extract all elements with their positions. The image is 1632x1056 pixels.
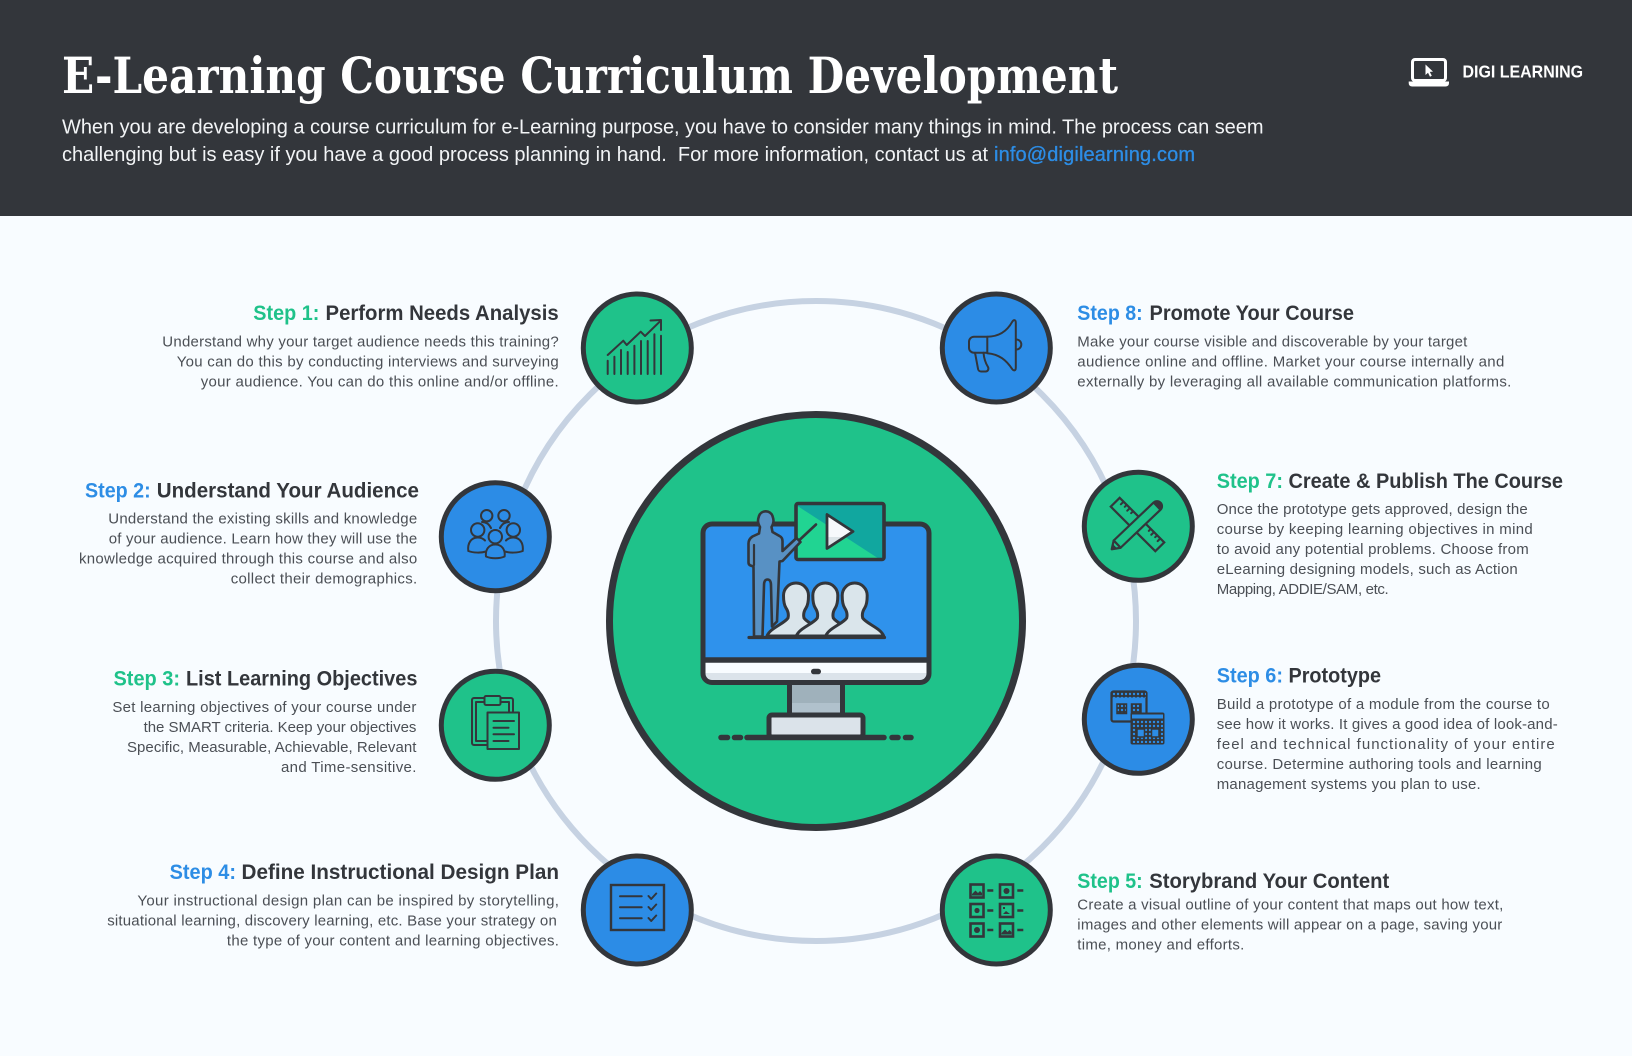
heading: step 5: Storybrand Your Content	[1149, 870, 1389, 893]
text: step 7: course by keeping learning objectives in mind	[1217, 521, 1533, 538]
video panel	[796, 504, 884, 560]
text: step 4: Your instructional design plan can be inspired by storytelling,	[137, 893, 559, 910]
intro text: info@digilearning.com	[994, 144, 1195, 166]
intro text: When you are developing a course curriculum for e-Learning purpose, you have to consider many things in mind. The process can seem	[62, 116, 1264, 138]
text: step 7: Mapping, ADDIE/SAM, etc.	[1217, 581, 1389, 598]
text: step 7: eLearning designing models, such as Action	[1217, 561, 1518, 578]
text: step 2	[79, 511, 417, 588]
text: step 1: Understand why your target audience needs this training?	[162, 334, 559, 351]
text: step 2: knowledge acquired through this course and also	[79, 551, 417, 568]
panel: step 7	[1084, 470, 1563, 598]
text: step 3: and Time-sensitive.	[281, 759, 416, 776]
icon: laptop logo	[1409, 60, 1449, 86]
text: step 5: Create a visual outline of your content that maps out how text,	[1077, 896, 1503, 913]
header banner	[0, 0, 1632, 216]
heading: step 3: List Learning Objectives	[186, 668, 417, 691]
text: step 3: Set learning objectives of your course under	[112, 699, 416, 716]
text: step 6: feel and technical functionality of your entire	[1217, 736, 1555, 753]
panel: step 8	[942, 294, 1511, 402]
title: E-Learning Course Curriculum Development	[62, 47, 1118, 105]
panel: step 1	[162, 294, 691, 402]
icon: checklist	[583, 856, 691, 964]
text: step 8: externally by leveraging all available communication platforms.	[1077, 374, 1511, 391]
heading: step 1: Perform Needs Analysis	[326, 302, 559, 325]
heading: step 8: Step 8:	[1077, 302, 1143, 325]
text: step 8	[1077, 334, 1511, 391]
heading: step 8: Promote Your Course	[1150, 302, 1354, 325]
heading: step 6	[1217, 665, 1381, 688]
panel: step 6	[1084, 665, 1558, 793]
brand name: DIGI LEARNING	[1462, 62, 1583, 82]
panel: step 3	[112, 668, 549, 779]
text: step 6: management systems you plan to use.	[1217, 776, 1481, 793]
text: step 1	[162, 334, 559, 391]
text: step 3: the SMART criteria. Keep your objectives	[144, 719, 416, 736]
audience silhouettes	[749, 583, 884, 638]
text: step 7: Once the prototype gets approved, design the	[1217, 501, 1528, 518]
heading: step 7: Create & Publish The Course	[1288, 470, 1563, 493]
monitor	[703, 524, 929, 738]
text: step 4: the type of your content and learning objectives.	[227, 933, 559, 950]
text: step 6: see how it works. It gives a good idea of look-and-	[1217, 716, 1558, 733]
icon: storyboard grid	[942, 856, 1050, 964]
text: step 5: time, money and efforts.	[1077, 936, 1244, 953]
text: step 7: to avoid any potential problems. Choose from	[1217, 541, 1529, 558]
heading: step 7: Step 7:	[1217, 470, 1283, 493]
icon: pencil and ruler	[1084, 472, 1192, 580]
heading: step 2: Step 2:	[85, 479, 151, 502]
heading: step 4: Define Instructional Design Plan	[242, 861, 559, 884]
icon: growth chart	[583, 294, 691, 402]
icon: layout windows	[1084, 665, 1192, 773]
text: step 1: You can do this by conducting interviews and surveying	[177, 354, 559, 371]
presenter figure	[748, 511, 816, 636]
text: step 3: Specific, Measurable, Achievable, Relevant	[127, 739, 417, 756]
connecting ring	[496, 301, 1136, 941]
text: step 4: situational learning, discovery learning, etc. Base your strategy on	[107, 913, 557, 930]
text: step 8: Make your course visible and discoverable by your target	[1077, 334, 1468, 351]
text: step 6: Build a prototype of a module from the course to	[1217, 696, 1550, 713]
heading: step 3: Step 3:	[114, 668, 180, 691]
text: step 6: course. Determine authoring tools and learning	[1217, 756, 1542, 773]
intro text	[62, 116, 1264, 166]
panel: step 2	[79, 479, 549, 591]
text: step 1: your audience. You can do this online and/or offline.	[201, 374, 559, 391]
text: step 5: images and other elements will appear on a page, saving your	[1077, 916, 1502, 933]
text: step 4	[107, 893, 559, 950]
intro text: challenging but is easy if you have a good process planning in hand. For more information, contact us at	[62, 144, 988, 166]
panel: step 5	[942, 856, 1503, 964]
text: step 2: collect their demographics.	[231, 571, 417, 588]
icon: clipboard	[441, 671, 549, 779]
text: step 7	[1217, 501, 1533, 598]
central circle	[610, 414, 1022, 828]
heading: step 1: Step 1:	[253, 302, 319, 325]
text: step 2: of your audience. Learn how they will use the	[109, 531, 417, 548]
panel: step 4	[107, 856, 691, 964]
icon: group of people	[441, 483, 549, 591]
heading: step 4: Step 4:	[170, 861, 236, 884]
central illustration	[610, 414, 1022, 828]
text: step 8: audience online and offline. Market your course internally and	[1077, 354, 1504, 371]
heading: step 6: Step 6:	[1217, 665, 1283, 688]
text: step 5	[1077, 896, 1503, 953]
text: step 3	[112, 699, 417, 776]
icon: megaphone	[942, 294, 1050, 402]
heading: step 6: Prototype	[1288, 665, 1381, 688]
text: step 6	[1217, 696, 1558, 793]
text: step 2: Understand the existing skills and knowledge	[108, 511, 417, 528]
heading: step 2: Understand Your Audience	[157, 479, 419, 502]
heading: step 5: Step 5:	[1077, 870, 1143, 893]
